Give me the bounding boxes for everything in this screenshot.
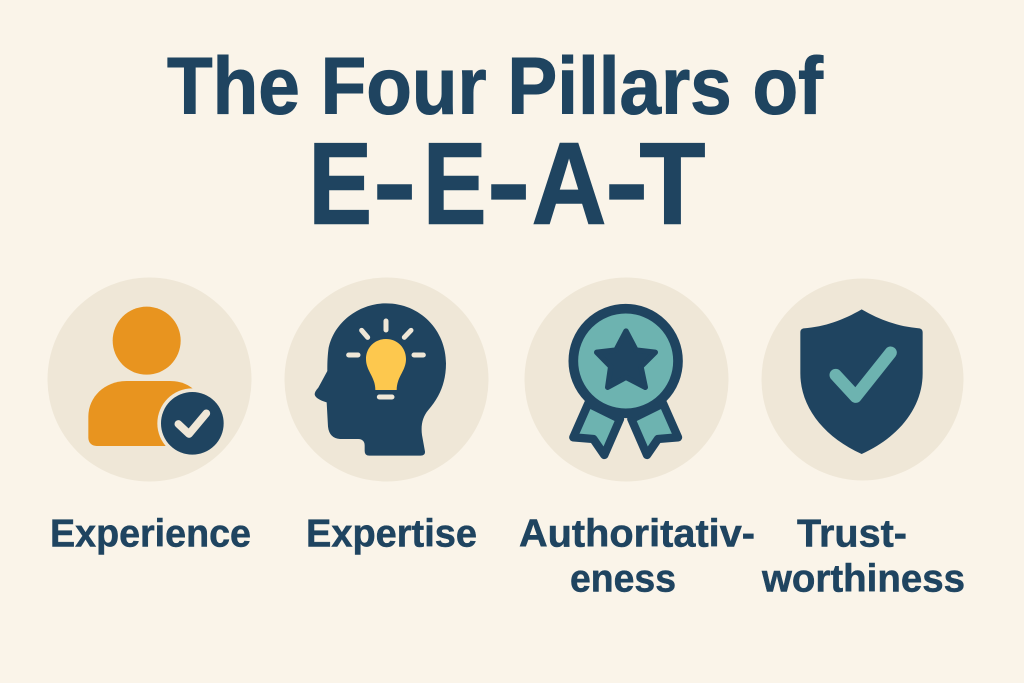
panel: trustworthiness: worthiness	[761, 558, 965, 600]
panel: authoritativeness	[519, 278, 755, 600]
label: expertise: Expertise	[306, 512, 477, 556]
panel: expertise	[284, 278, 488, 556]
title	[167, 42, 824, 249]
title: -	[373, 118, 416, 247]
label: authoritativeness: Authoritativ-	[519, 512, 755, 556]
title: T	[640, 119, 705, 248]
icon: award rosette with star	[573, 309, 678, 455]
icon: head with light bulb	[315, 303, 446, 456]
panel: experience	[48, 278, 252, 556]
label: trustworthiness: Trust-	[797, 512, 907, 556]
title: -	[487, 118, 530, 247]
title: -	[605, 118, 648, 247]
title: The Four Pillars of	[167, 42, 824, 132]
title: A	[532, 120, 606, 249]
label: experience: Experience	[50, 512, 251, 556]
panel: trustworthiness	[761, 278, 965, 600]
icon: person with check badge	[88, 307, 227, 458]
title: E	[423, 120, 486, 249]
panel: authoritativeness: eness	[570, 558, 676, 600]
icon: shield with check	[800, 309, 923, 454]
title: E	[308, 120, 372, 249]
